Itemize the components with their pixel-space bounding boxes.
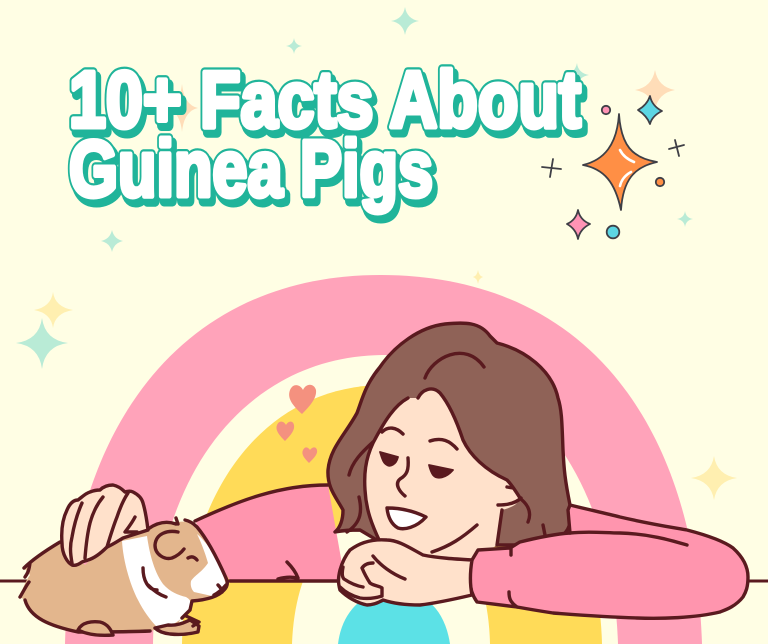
- front feet: [155, 620, 199, 634]
- eye: [188, 557, 197, 560]
- back foot: [78, 622, 113, 635]
- near arm: [470, 505, 748, 618]
- title: Guinea Pigs: [72, 129, 436, 218]
- chest fur: [143, 568, 166, 597]
- hair: [328, 323, 571, 545]
- ear: [155, 531, 184, 558]
- fist: [338, 540, 472, 605]
- icon: orange star: [583, 114, 657, 210]
- eyebrows: [382, 428, 457, 449]
- hair strands: [347, 353, 545, 535]
- petting hand: [62, 485, 148, 565]
- ground line: [0, 580, 768, 582]
- icon: cyan star: [638, 96, 662, 124]
- icon: orange dot: [656, 178, 664, 186]
- nose: [214, 585, 226, 595]
- title: 10+ Facts About: [72, 60, 584, 149]
- title: [69, 55, 584, 218]
- white chest patch: [122, 536, 191, 627]
- icon: cross right: [669, 140, 684, 156]
- nose: [397, 458, 408, 496]
- body outline: [20, 518, 227, 632]
- face: [365, 389, 520, 562]
- face outline: [365, 389, 520, 542]
- title: Guinea Pigs: [69, 124, 433, 213]
- mouth: [387, 508, 426, 529]
- guinea pig: [20, 518, 228, 635]
- white face patch: [191, 534, 226, 596]
- girl far arm: [195, 485, 345, 581]
- body: [20, 522, 228, 632]
- rainbow: [65, 275, 702, 644]
- title: 10+ Facts About: [69, 55, 581, 144]
- title: 10+ Facts About: [69, 55, 581, 144]
- hearts: [276, 385, 317, 463]
- eyes: [380, 452, 453, 478]
- icon: cross left: [542, 159, 561, 177]
- background sparkles: [16, 7, 737, 500]
- icon: pink star: [567, 210, 590, 239]
- jaw: [432, 498, 521, 552]
- title: Guinea Pigs: [69, 124, 433, 213]
- girl: [328, 323, 571, 562]
- icon: pink dot: [602, 106, 610, 114]
- icon: cyan dot: [607, 226, 619, 238]
- sparkle cluster: [542, 96, 684, 239]
